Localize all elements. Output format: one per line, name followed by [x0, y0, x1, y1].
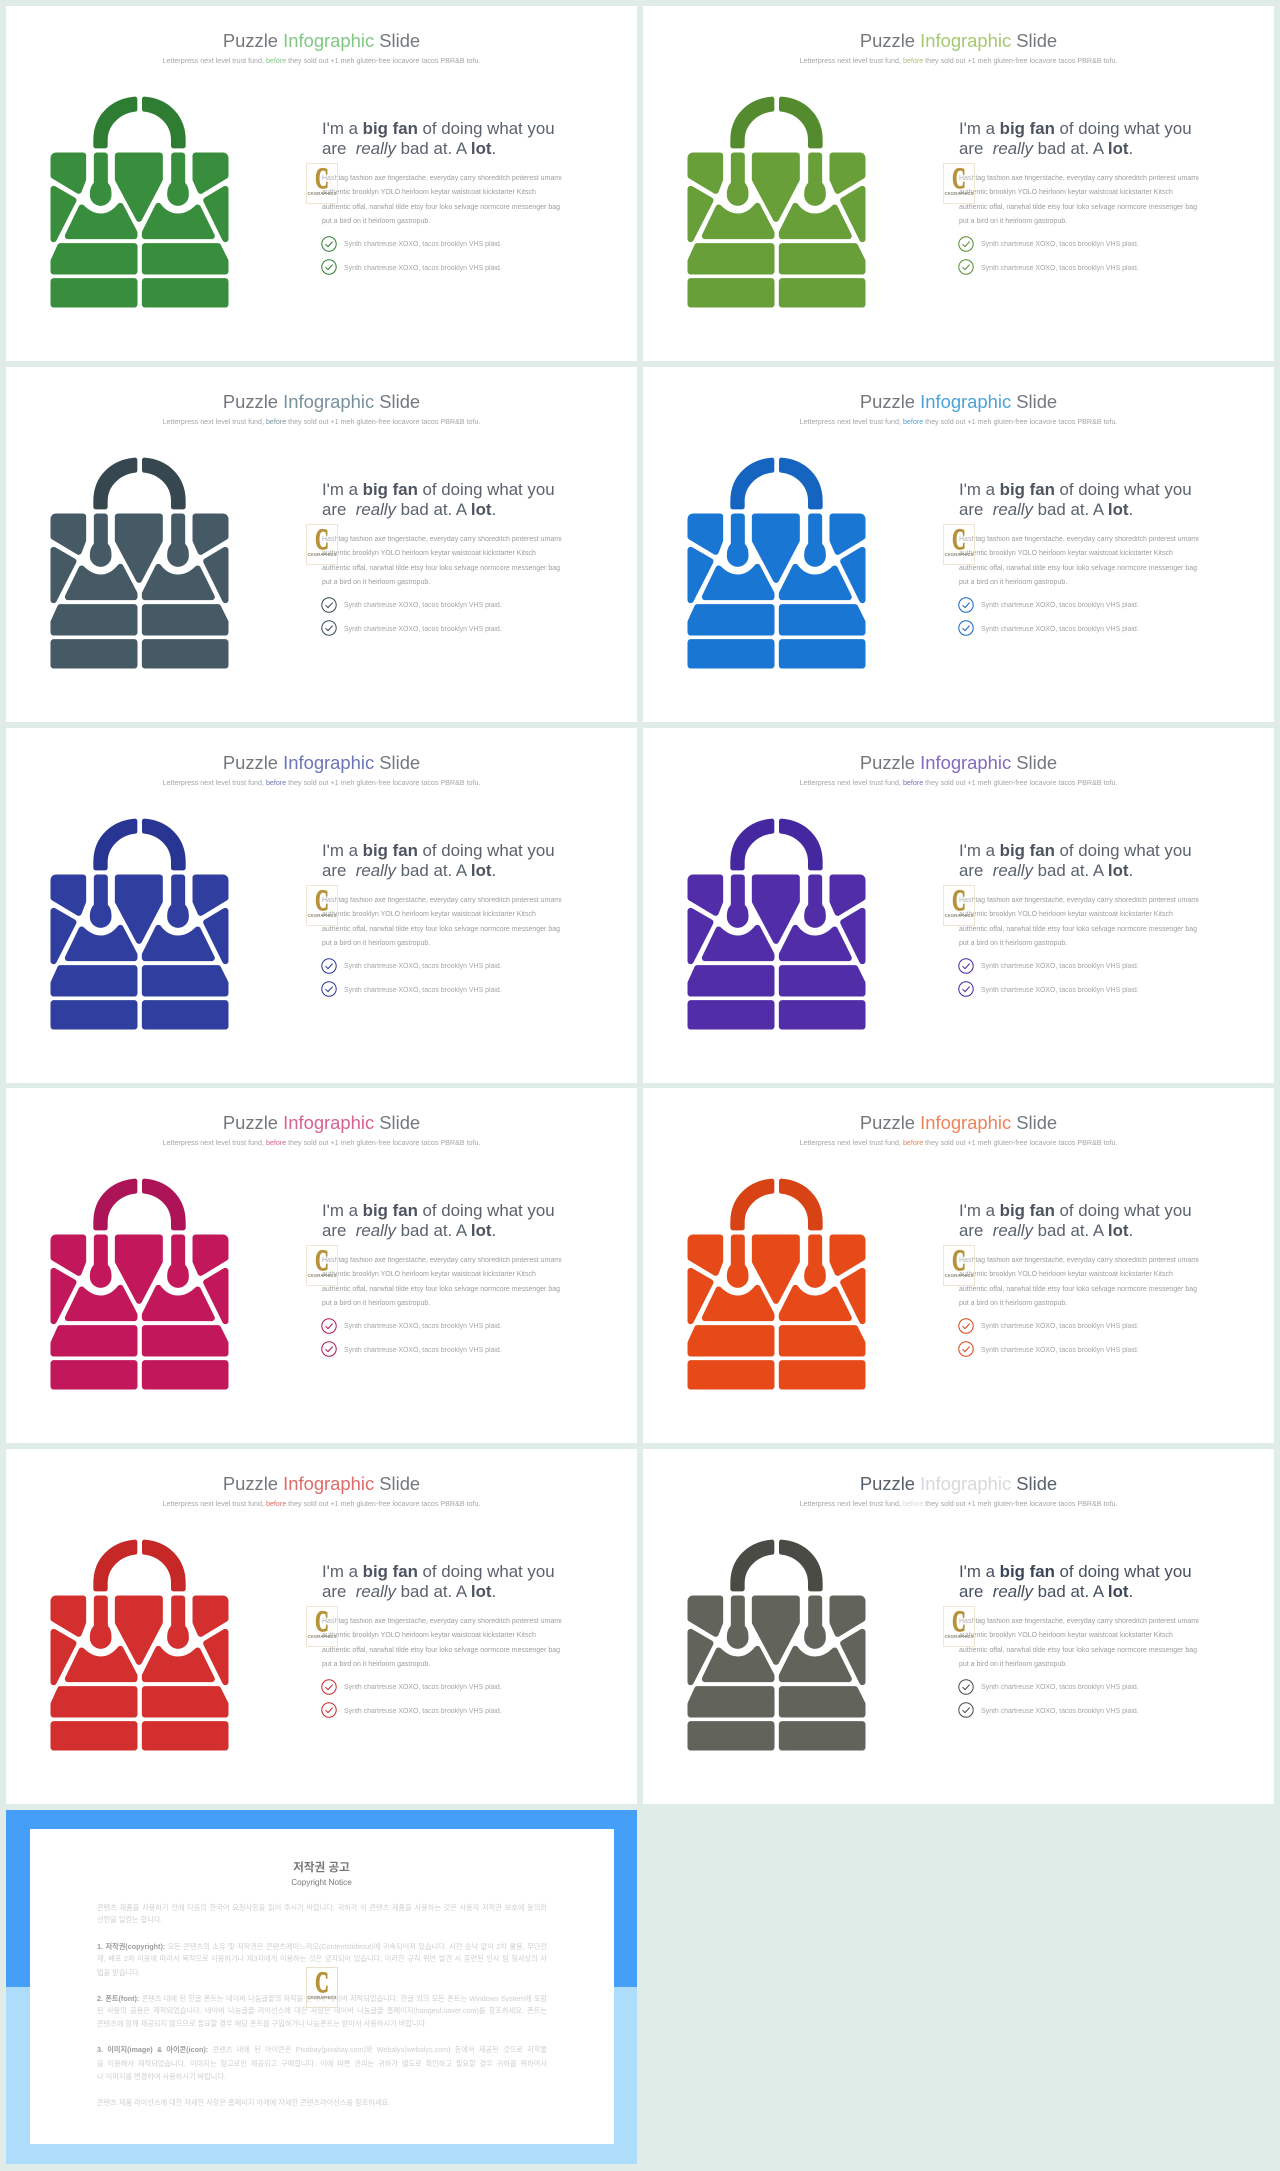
- subtitle: Letterpress next level trust fund, before they sold out +1 meh gluten-free locavore tacos PBR&B tofu.: [163, 779, 480, 787]
- subtitle: Letterpress next level trust fund, before they sold out +1 meh gluten-free locavore tacos PBR&B tofu.: [800, 1500, 1117, 1508]
- subtitle: Letterpress next level trust fund, before they sold out +1 meh gluten-free locavore tacos PBR&B tofu.: [800, 418, 1117, 426]
- body text: authentic brooklyn YOLO heirloom keytar waistcoat kickstarter Kitsch: [959, 1632, 1173, 1639]
- icon: check 2: [321, 259, 337, 275]
- checklist item 1: Synth chartreuse XOXO, tacos brooklyn VHS plaid.: [344, 963, 502, 970]
- body text: put a bird on it heirloom gastropub.: [959, 940, 1067, 947]
- panel: orange slide: [643, 1088, 1274, 1443]
- body text: put a bird on it heirloom gastropub.: [959, 1661, 1067, 1668]
- panel: copyright notice: 법을 받습니다.: [97, 1968, 141, 1977]
- heading: are really bad at. A lot.: [959, 1582, 1133, 1601]
- checklist item 2: Synth chartreuse XOXO, tacos brooklyn VHS plaid.: [344, 986, 502, 994]
- icon: puzzle handbag: [50, 96, 228, 308]
- heading: are really bad at. A lot.: [959, 500, 1133, 519]
- icon: check 1: [321, 1679, 337, 1695]
- body text: [959, 175, 1199, 225]
- icon: check 1: [958, 236, 974, 252]
- body text: authentic offal, narwhal tilde etsy four loko selvage normcore messenger bag: [959, 1647, 1197, 1654]
- body text: put a bird on it heirloom gastropub.: [322, 1300, 430, 1307]
- panel: green slide: [6, 6, 637, 361]
- watermark: CKGRAPHICS: [308, 913, 336, 918]
- watermark: [943, 885, 975, 926]
- title: Puzzle Infographic Slide: [860, 391, 1057, 412]
- subtitle: Letterpress next level trust fund, before they sold out +1 meh gluten-free locavore tacos PBR&B tofu.: [163, 57, 480, 65]
- checklist item 2: Synth chartreuse XOXO, tacos brooklyn VHS plaid.: [344, 264, 502, 272]
- heading: I'm a big fan of doing what you: [322, 1201, 555, 1220]
- body text: Hashtag fashion axe fingerstache, everyday carry shoreditch pinterest umami: [322, 1257, 562, 1264]
- title: Puzzle Infographic Slide: [860, 1112, 1057, 1133]
- watermark: CKGRAPHICS: [308, 552, 336, 557]
- heading: I'm a big fan of doing what you: [959, 1562, 1192, 1581]
- checklist item 1: Synth chartreuse XOXO, tacos brooklyn VHS plaid.: [344, 1323, 502, 1330]
- icon: puzzle handbag: [688, 458, 866, 668]
- heading: [322, 119, 555, 158]
- icon: check 1: [321, 1318, 337, 1334]
- heading: [959, 119, 1192, 158]
- icon: puzzle handbag: [50, 818, 228, 1030]
- heading: I'm a big fan of doing what you: [322, 841, 555, 860]
- watermark: [306, 1967, 338, 2008]
- icon: check 1: [321, 958, 337, 974]
- section 3: image and icon: 3. 이미지(image) & 아이콘(icon): 콘텐츠 내에 된 아이콘은 Pixabay(pixabay.com)와 Webalys(webalys.com) 등에서 제공된 것으로 저작물: [97, 2045, 547, 2054]
- panel: blue slide: [643, 367, 1274, 722]
- heading: I'm a big fan of doing what you: [959, 841, 1192, 860]
- watermark: CKGRAPHICS: [945, 552, 973, 557]
- body text: authentic offal, narwhal tilde etsy four loko selvage normcore messenger bag: [322, 1286, 560, 1293]
- icon: check 1: [958, 1679, 974, 1695]
- checklist item 2: Synth chartreuse XOXO, tacos brooklyn VHS plaid.: [344, 1708, 502, 1714]
- subtitle: Letterpress next level trust fund, before they sold out +1 meh gluten-free locavore tacos PBR&B tofu.: [800, 1139, 1117, 1147]
- title: Puzzle Infographic Slide: [223, 30, 420, 51]
- checklist item 1: Synth chartreuse XOXO, tacos brooklyn VHS plaid.: [344, 1684, 502, 1691]
- watermark: CKGRAPHICS: [308, 191, 336, 196]
- checklist item 1: Synth chartreuse XOXO, tacos brooklyn VHS plaid.: [981, 1323, 1139, 1330]
- heading: I'm a big fan of doing what you: [959, 1201, 1192, 1220]
- body text: [959, 536, 1199, 586]
- heading: [959, 480, 1192, 519]
- title: Puzzle Infographic Slide: [223, 752, 420, 773]
- body text: [959, 1615, 1209, 1673]
- body text: authentic brooklyn YOLO heirloom keytar waistcoat kickstarter Kitsch: [322, 189, 536, 196]
- body text: [322, 1254, 572, 1312]
- heading: [322, 1562, 582, 1602]
- body text: authentic offal, narwhal tilde etsy four loko selvage normcore messenger bag: [322, 204, 560, 211]
- icon: check 2: [958, 1702, 974, 1718]
- heading: are really bad at. A lot.: [322, 1582, 496, 1601]
- checklist item 2: Synth chartreuse XOXO, tacos brooklyn VHS plaid.: [981, 986, 1139, 994]
- body text: put a bird on it heirloom gastropub.: [959, 1300, 1067, 1307]
- panel: red slide: [6, 1449, 637, 1804]
- heading: are really bad at. A lot.: [959, 139, 1133, 158]
- icon: check 1: [321, 236, 337, 252]
- heading: I'm a big fan of doing what you: [322, 480, 555, 499]
- title: Puzzle Infographic Slide: [223, 1112, 420, 1133]
- body text: authentic offal, narwhal tilde etsy four loko selvage normcore messenger bag: [322, 565, 560, 572]
- icon: puzzle handbag: [666, 1523, 886, 1763]
- watermark: [306, 524, 338, 565]
- icon: check 2: [321, 1341, 337, 1357]
- watermark: [943, 1606, 975, 1647]
- checklist item 1: Synth chartreuse XOXO, tacos brooklyn VHS plaid.: [981, 1684, 1139, 1691]
- body text: Hashtag fashion axe fingerstache, everyday carry shoreditch pinterest umami: [322, 1618, 562, 1625]
- body text: [959, 897, 1199, 947]
- title: Puzzle Infographic Slide: [860, 30, 1057, 51]
- body text: authentic brooklyn YOLO heirloom keytar waistcoat kickstarter Kitsch: [959, 550, 1173, 557]
- heading: I'm a big fan of doing what you: [959, 480, 1192, 499]
- heading: are really bad at. A lot.: [322, 861, 496, 880]
- icon: check 2: [321, 1702, 337, 1718]
- heading: [322, 480, 555, 519]
- checklist item 1: Synth chartreuse XOXO, tacos brooklyn VHS plaid.: [981, 963, 1139, 970]
- panel: copyright notice: [6, 1810, 637, 2164]
- body text: [322, 536, 562, 586]
- watermark: [943, 524, 975, 565]
- heading: are really bad at. A lot.: [322, 500, 496, 519]
- subtitle: Letterpress next level trust fund, before they sold out +1 meh gluten-free locavore tacos PBR&B tofu.: [163, 418, 480, 426]
- checklist item 1: Synth chartreuse XOXO, tacos brooklyn VHS plaid.: [981, 241, 1139, 248]
- icon: check 2: [958, 620, 974, 636]
- icon: check 2: [958, 981, 974, 997]
- icon: puzzle handbag: [666, 1162, 886, 1402]
- body text: authentic brooklyn YOLO heirloom keytar waistcoat kickstarter Kitsch: [322, 1271, 536, 1278]
- watermark: CKGRAPHICS: [945, 191, 973, 196]
- watermark: [943, 1245, 975, 1286]
- heading: are really bad at. A lot.: [959, 1221, 1133, 1240]
- watermark: [943, 163, 975, 204]
- closing line: 콘텐츠 제품 라이선스에 대한 자세한 사항은 홈페이지 아래에 자세한 콘텐츠라이선스를 참조하세요.: [97, 2098, 390, 2107]
- icon: check 2: [321, 620, 337, 636]
- icon: check 1: [958, 597, 974, 613]
- body text: authentic brooklyn YOLO heirloom keytar waistcoat kickstarter Kitsch: [322, 1632, 536, 1639]
- subtitle: Letterpress next level trust fund, before they sold out +1 meh gluten-free locavore tacos PBR&B tofu.: [800, 779, 1117, 787]
- watermark: [306, 163, 338, 204]
- icon: puzzle handbag: [30, 1523, 250, 1763]
- heading: I'm a big fan of doing what you: [959, 119, 1192, 138]
- watermark: CKGRAPHICS: [945, 1634, 973, 1639]
- watermark: CKGRAPHICS: [308, 1634, 336, 1639]
- body text: Hashtag fashion axe fingerstache, everyday carry shoreditch pinterest umami: [322, 897, 562, 904]
- icon: puzzle handbag: [688, 96, 866, 308]
- heading: I'm a big fan of doing what you: [322, 1562, 555, 1581]
- body text: Hashtag fashion axe fingerstache, everyday carry shoreditch pinterest umami: [959, 175, 1199, 182]
- heading: are really bad at. A lot.: [322, 1221, 496, 1240]
- body text: authentic offal, narwhal tilde etsy four loko selvage normcore messenger bag: [959, 204, 1197, 211]
- title: Puzzle Infographic Slide: [223, 1473, 420, 1494]
- body text: authentic offal, narwhal tilde etsy four loko selvage normcore messenger bag: [959, 565, 1197, 572]
- icon: puzzle handbag: [50, 458, 228, 668]
- icon: check 2: [321, 981, 337, 997]
- heading: [959, 1562, 1219, 1602]
- body text: authentic offal, narwhal tilde etsy four loko selvage normcore messenger bag: [322, 1647, 560, 1654]
- panel: copyright notice: 을 이용해서 제작되었습니다. 이미지는 참고로만 제공되고 구매합니다. 이에 따른 권리는 귀하가 별도로 확인하고 필요할 경우 귀하를 위하여서: [97, 2059, 547, 2068]
- subtitle: Letterpress next level trust fund, before they sold out +1 meh gluten-free locavore tacos PBR&B tofu.: [163, 1500, 480, 1508]
- body text: authentic brooklyn YOLO heirloom keytar waistcoat kickstarter Kitsch: [322, 550, 536, 557]
- body text: authentic brooklyn YOLO heirloom keytar waistcoat kickstarter Kitsch: [959, 189, 1173, 196]
- body text: authentic offal, narwhal tilde etsy four loko selvage normcore messenger bag: [322, 926, 560, 933]
- panel: grey slide: [643, 1449, 1274, 1804]
- title: Puzzle Infographic Slide: [223, 391, 420, 412]
- watermark: [306, 1606, 338, 1647]
- body text: authentic brooklyn YOLO heirloom keytar waistcoat kickstarter Kitsch: [959, 911, 1173, 918]
- panel: pink slide: [6, 1088, 637, 1443]
- panel: copyright notice: 콘텐츠에 함께 제공되지 않으므로 필요할 경우 해당 폰트를 구입하거나 나눔폰트는 받아서 사용하시기 바랍니다.: [97, 2019, 427, 2028]
- body text: [322, 175, 562, 225]
- panel: indigo slide: [6, 728, 637, 1083]
- body text: authentic brooklyn YOLO heirloom keytar waistcoat kickstarter Kitsch: [322, 911, 536, 918]
- heading: [959, 1201, 1219, 1241]
- body text: put a bird on it heirloom gastropub.: [322, 1661, 430, 1668]
- watermark: [306, 885, 338, 926]
- checklist item 1: Synth chartreuse XOXO, tacos brooklyn VHS plaid.: [344, 602, 502, 609]
- white notice card: [30, 1829, 614, 2144]
- panel: purple slide: [643, 728, 1274, 1083]
- heading: are really bad at. A lot.: [322, 139, 496, 158]
- subtitle: Letterpress next level trust fund, before they sold out +1 meh gluten-free locavore tacos PBR&B tofu.: [163, 1139, 480, 1147]
- title: Puzzle Infographic Slide: [860, 1473, 1057, 1494]
- icon: check 1: [958, 1318, 974, 1334]
- watermark: CKGRAPHICS: [308, 1995, 336, 2000]
- heading: are really bad at. A lot.: [959, 861, 1133, 880]
- body text: [322, 897, 562, 947]
- heading: [959, 841, 1192, 880]
- body text: put a bird on it heirloom gastropub.: [322, 940, 430, 947]
- body text: [322, 1615, 572, 1673]
- icon: check 1: [321, 597, 337, 613]
- checklist item 1: Synth chartreuse XOXO, tacos brooklyn VHS plaid.: [344, 241, 502, 248]
- panel: copyright notice: 재, 배포 2차 이용에 따라서 목적으로 이용하거나 제3자에게 이용하는 것은 금지되어 있습니다. 이러한 규칙 위반 발견 시 훈련된 인사 팀 형사상의 사: [97, 1954, 547, 1963]
- body text: Hashtag fashion axe fingerstache, everyday carry shoreditch pinterest umami: [959, 897, 1199, 904]
- notice subtitle: Copyright Notice: [291, 1878, 352, 1887]
- watermark: CKGRAPHICS: [308, 1273, 336, 1278]
- checklist item 1: Synth chartreuse XOXO, tacos brooklyn VHS plaid.: [981, 602, 1139, 609]
- watermark: [306, 1245, 338, 1286]
- icon: puzzle handbag: [30, 1162, 250, 1402]
- checklist item 2: Synth chartreuse XOXO, tacos brooklyn VHS plaid.: [344, 626, 502, 632]
- icon: check 2: [958, 259, 974, 275]
- watermark: CKGRAPHICS: [945, 1273, 973, 1278]
- watermark: CKGRAPHICS: [945, 913, 973, 918]
- heading: [322, 1201, 582, 1241]
- body text: Hashtag fashion axe fingerstache, everyday carry shoreditch pinterest umami: [959, 1257, 1199, 1264]
- panel: slate slide: [6, 367, 637, 722]
- section 2: font: 2. 폰트(font): 콘텐츠 내에 된 한글 폰트는 네이버 나눔글꼴의 저작을 받아서 네이버 저작되었습니다. 한글 외의 모든 폰트는 Windows System에 포함: [97, 1994, 547, 2003]
- body text: authentic offal, narwhal tilde etsy four loko selvage normcore messenger bag: [959, 1286, 1197, 1293]
- heading: I'm a big fan of doing what you: [322, 119, 555, 138]
- panel: copyright notice: 된 사용의 공용은 제작되었습니다. 네이버 나눔글꼴 라이선스에 대한 사항은 네이버 나눔글꼴 홈페이지(hangeul.naver.com)를 참조하세요. 폰트는: [97, 2006, 547, 2015]
- body text: Hashtag fashion axe fingerstache, everyday carry shoreditch pinterest umami: [322, 536, 562, 543]
- checklist item 2: Synth chartreuse XOXO, tacos brooklyn VHS plaid.: [344, 1346, 502, 1354]
- section 1: copyright: 1. 저작권(copyright): 모든 콘텐츠의 소유 및 저작권은 콘텐츠메이느리오(Contentslideout)에 귀속되어져 있습니다. 사전 승낙 없이 2차 활용, 무단전: [97, 1942, 547, 1951]
- icon: check 1: [958, 958, 974, 974]
- title: Puzzle Infographic Slide: [860, 752, 1057, 773]
- checklist item 2: Synth chartreuse XOXO, tacos brooklyn VHS plaid.: [981, 1346, 1139, 1354]
- body text: Hashtag fashion axe fingerstache, everyday carry shoreditch pinterest umami: [322, 175, 562, 182]
- body text: put a bird on it heirloom gastropub.: [959, 579, 1067, 586]
- panel: copyright notice: 선언을 일컫는 합니다.: [97, 1915, 163, 1924]
- body text: Hashtag fashion axe fingerstache, everyday carry shoreditch pinterest umami: [959, 1618, 1199, 1625]
- intro paragraph: 콘텐츠 제품을 사용하기 전에 다음의 한국어 요청사항을 읽어 주시기 바랍니다. 귀하가 이 콘텐츠 제품을 사용하는 것은 사용자 저작권 보호에 동의와: [97, 1903, 547, 1912]
- checklist item 2: Synth chartreuse XOXO, tacos brooklyn VHS plaid.: [981, 264, 1139, 272]
- subtitle: Letterpress next level trust fund, before they sold out +1 meh gluten-free locavore tacos PBR&B tofu.: [800, 57, 1117, 65]
- notice title: 저작권 공고: [293, 1861, 350, 1874]
- body text: put a bird on it heirloom gastropub.: [322, 218, 430, 225]
- body text: [959, 1254, 1209, 1312]
- body text: authentic brooklyn YOLO heirloom keytar waistcoat kickstarter Kitsch: [959, 1271, 1173, 1278]
- body text: Hashtag fashion axe fingerstache, everyday carry shoreditch pinterest umami: [959, 536, 1199, 543]
- body text: authentic offal, narwhal tilde etsy four loko selvage normcore messenger bag: [959, 926, 1197, 933]
- checklist item 2: Synth chartreuse XOXO, tacos brooklyn VHS plaid.: [981, 626, 1139, 632]
- body text: put a bird on it heirloom gastropub.: [322, 579, 430, 586]
- panel: light green slide: [643, 6, 1274, 361]
- icon: puzzle handbag: [688, 818, 866, 1030]
- checklist item 2: Synth chartreuse XOXO, tacos brooklyn VHS plaid.: [981, 1708, 1139, 1714]
- body text: put a bird on it heirloom gastropub.: [959, 218, 1067, 225]
- icon: check 2: [958, 1341, 974, 1357]
- heading: [322, 841, 555, 880]
- panel: copyright notice: 나 이미지를 변경하여 사용하시기 바랍니다.: [97, 2072, 226, 2081]
